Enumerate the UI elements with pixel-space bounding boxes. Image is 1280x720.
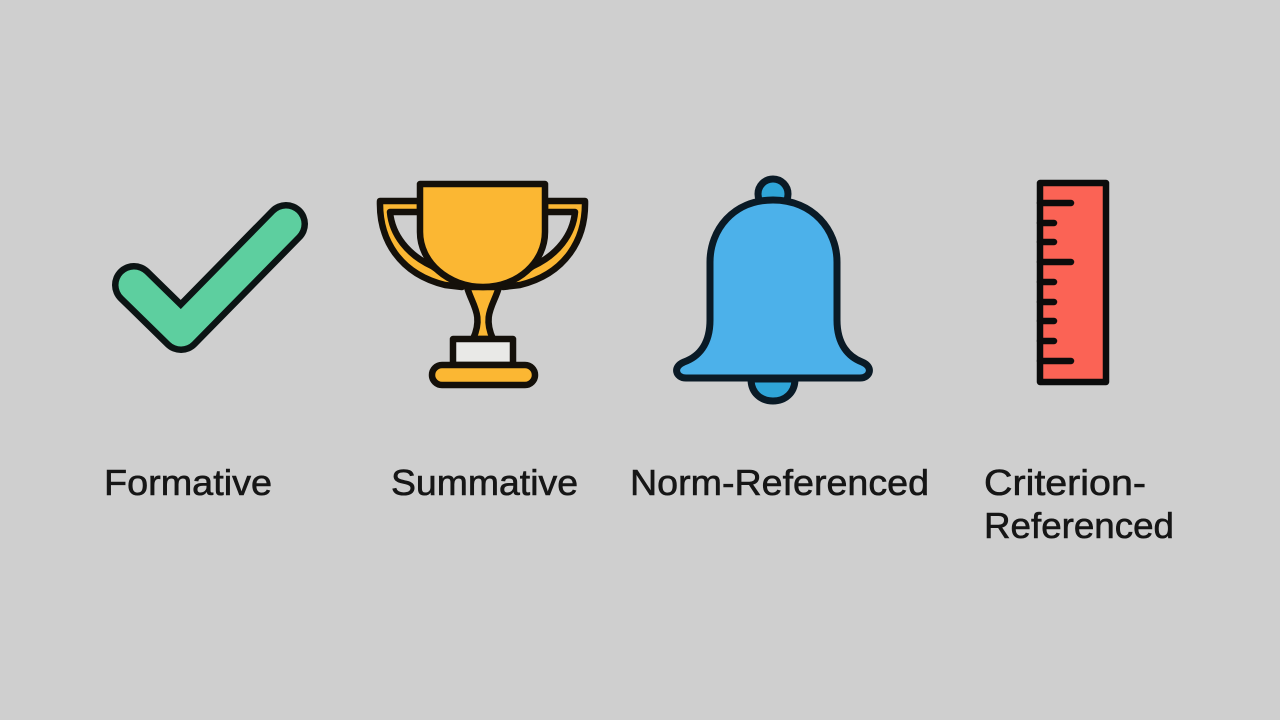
bell top knob [758, 179, 788, 209]
icon: green check mark [134, 224, 286, 331]
trophy base plate [432, 365, 535, 385]
ruler ticks [1040, 203, 1071, 361]
bell body [677, 200, 869, 378]
label: Summative: Summative [391, 462, 578, 503]
ruler body [1040, 183, 1106, 382]
label: Criterion-Referenced [984, 462, 1174, 546]
icon: red ruler [1040, 183, 1106, 382]
trophy stem [467, 287, 499, 339]
bell clapper [751, 379, 795, 401]
trophy cup [420, 184, 545, 287]
label: Formative: Formative [104, 462, 272, 503]
label: Criterion-Referenced: Referenced [984, 505, 1174, 546]
icon: gold trophy [380, 184, 585, 385]
trophy handles [380, 201, 585, 287]
trophy base block [453, 339, 513, 365]
label: Criterion-Referenced: Criterion- [984, 462, 1146, 503]
label: Norm-Referenced: Norm-Referenced [630, 462, 929, 503]
icon: blue bell [677, 179, 869, 401]
